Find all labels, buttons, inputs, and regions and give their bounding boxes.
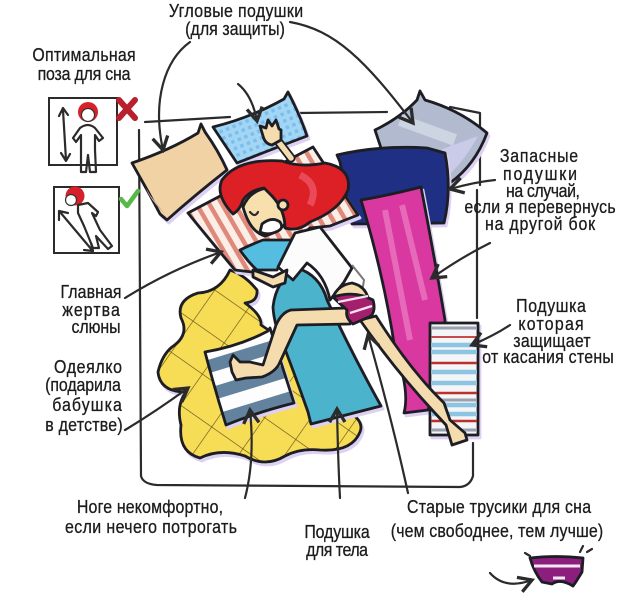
label: body pillow: для тела <box>306 539 368 560</box>
pillow: striped under head <box>188 147 358 272</box>
label: corner pillows: (для защиты) <box>185 18 285 39</box>
panties <box>333 283 374 324</box>
label: old panties: Старые трусики для сна <box>407 496 591 517</box>
label: saliva victim: Главная <box>60 281 122 302</box>
label: blanket: (подарила <box>45 374 121 395</box>
label: leg pillow: Ноге некомфортно, <box>77 496 223 517</box>
label: spare pillows <box>464 145 616 234</box>
body pillow <box>273 268 381 424</box>
arrow: corner pillows, left <box>159 42 190 150</box>
arrow: panties <box>368 335 408 493</box>
blue sleeve area at the chest <box>240 240 293 270</box>
pillow: striped by the wall <box>430 323 478 435</box>
title: optimal pose <box>32 44 136 84</box>
icon: panties with arrow <box>490 546 592 586</box>
arrow: spare pillows pink <box>432 243 490 278</box>
label: spare pillows: на случай, <box>506 180 580 201</box>
striped grey pillow <box>205 328 294 425</box>
title: optimal pose: Оптимальная <box>32 44 136 65</box>
label: blanket: бабушка <box>52 394 122 415</box>
title: optimal pose: поза для сна <box>38 63 131 84</box>
label: blanket: в детстве) <box>45 414 123 435</box>
label: corner pillows: Угловые подушки <box>169 0 303 21</box>
back leg <box>360 316 467 445</box>
pillow: navy spare <box>337 147 448 224</box>
label: spare pillows: Запасные <box>500 145 578 166</box>
label: corner pillows <box>169 0 303 39</box>
label: spare pillows: на другой бок <box>485 213 595 234</box>
label: blanket: Одеялко <box>54 356 122 377</box>
white t-shirt <box>278 227 364 300</box>
icon: green check <box>121 191 138 206</box>
arrow: wall pillow <box>472 325 510 345</box>
pillow: beige corner <box>132 124 227 220</box>
lower arm <box>253 270 287 287</box>
label: saliva victim: жертва <box>62 299 120 320</box>
label: wall pillow: от касания стены <box>482 346 614 367</box>
label: spare pillows: если я перевернусь <box>464 196 616 217</box>
blanket <box>158 270 361 462</box>
arrow: corner pillows, right <box>290 22 413 123</box>
arrow: leg pillow <box>245 410 252 498</box>
bed outline <box>139 107 480 487</box>
label: wall pillow: которая <box>518 313 584 334</box>
head: face <box>243 188 288 236</box>
label: saliva victim: слюны <box>71 316 121 337</box>
red hair <box>220 161 349 229</box>
bent front leg with foot <box>230 308 350 380</box>
label: leg pillow <box>65 496 237 537</box>
arrow: blanket <box>125 388 188 430</box>
arrow: body pillow <box>337 409 340 498</box>
arrow: saliva victim <box>125 252 221 298</box>
label: body pillow <box>304 521 370 560</box>
icon: red cross <box>119 100 135 118</box>
label: blanket <box>45 356 123 435</box>
raised arm and hand <box>260 120 291 158</box>
arrow: corner pillows, centre <box>238 84 257 121</box>
label: body pillow: Подушка <box>304 521 370 542</box>
label: leg pillow: если нечего потрогать <box>65 516 237 537</box>
label: spare pillows: подушки <box>503 163 577 184</box>
label: old panties <box>391 496 603 541</box>
label: old panties: (чем свободнее, тем лучше) <box>391 520 603 541</box>
label: wall pillow <box>482 295 614 367</box>
icon: correct diagonal pose <box>54 186 119 253</box>
label: saliva victim <box>60 281 122 337</box>
icon: wrong straight pose <box>49 98 117 172</box>
pillow: blue checked <box>213 92 307 163</box>
label: wall pillow: защищает <box>513 330 591 351</box>
label: wall pillow: Подушка <box>516 295 586 316</box>
pillow: tall pink <box>361 187 445 413</box>
pillow: grey corner <box>375 91 487 183</box>
arrow: spare pillows navy <box>450 180 495 189</box>
